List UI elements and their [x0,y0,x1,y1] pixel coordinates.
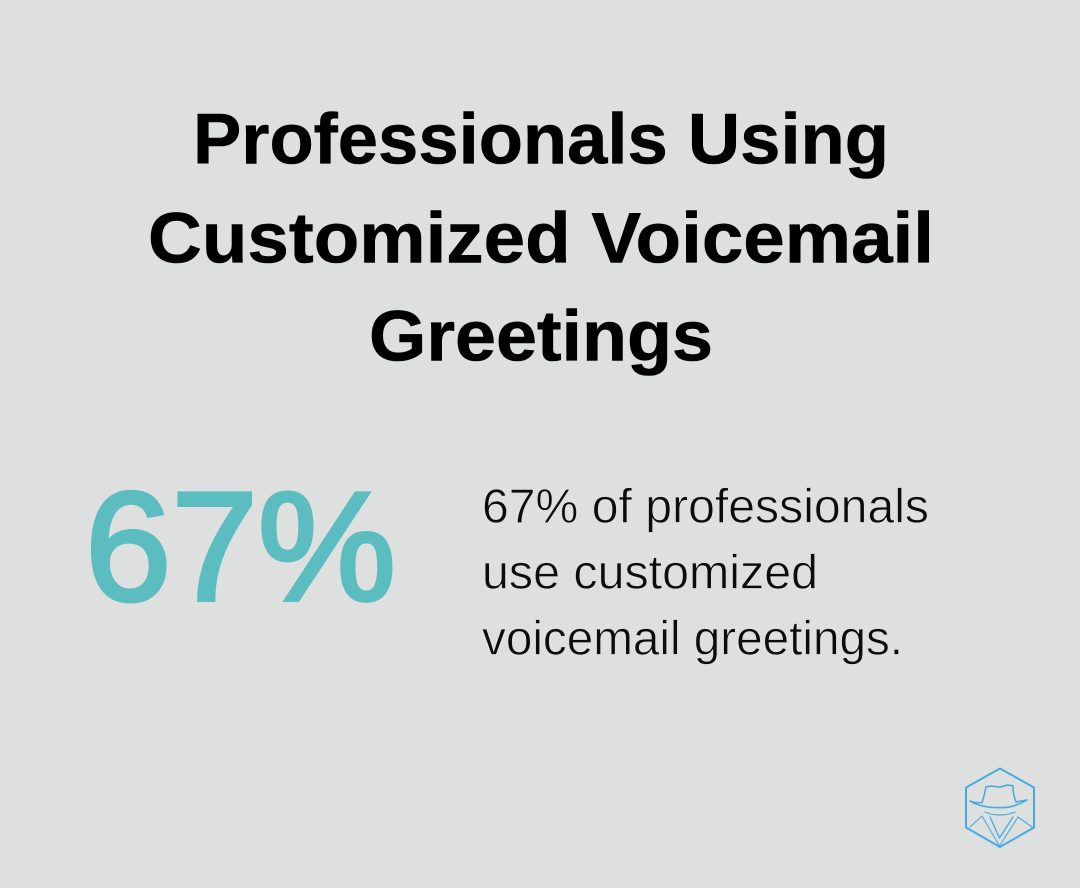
title: Greetings [369,298,713,376]
description text [482,481,929,666]
title: Professionals Using [193,100,889,180]
description text: 67% of professionals [482,481,929,534]
title: Customized Voicemail [148,200,934,278]
icon: logo hexagon with hat figure [966,768,1034,847]
title [148,100,934,376]
big statistic: 67% [85,460,396,633]
description text: use customized [482,547,818,600]
description text: voicemail greetings. [482,613,903,666]
